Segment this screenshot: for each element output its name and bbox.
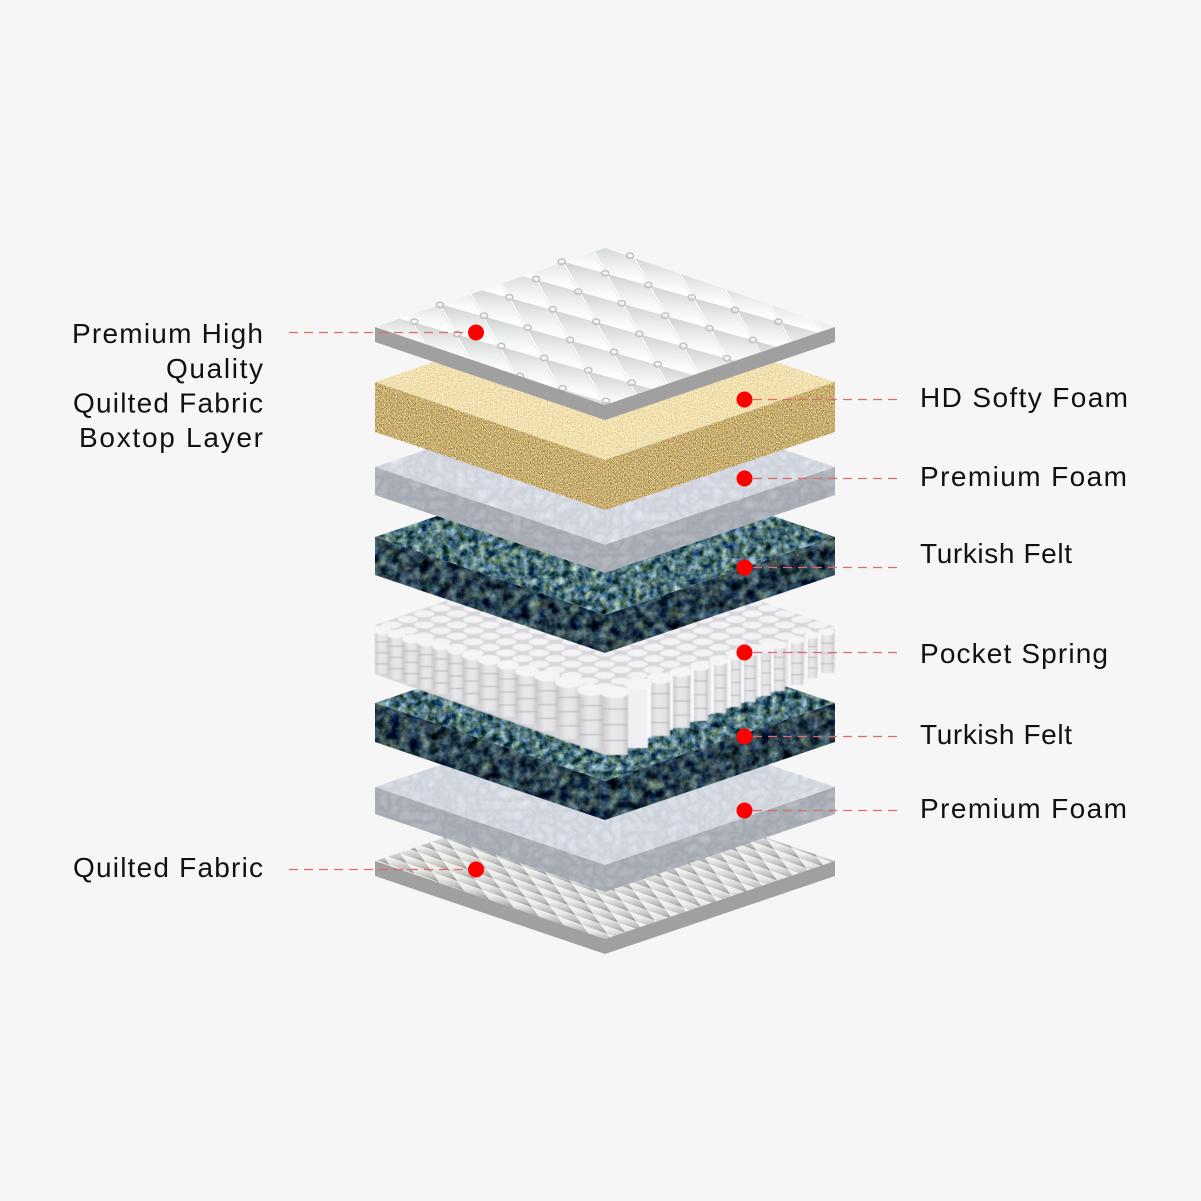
label: Turkish Felt lower: Turkish Felt [920,719,1072,750]
leader: HD Softy Foam [736,392,897,408]
label: Turkish Felt upper: Turkish Felt [920,538,1072,569]
layer: upper premium foam [375,389,835,573]
bottom fabric top face [375,783,835,939]
spring top face [375,547,835,703]
label: Premium High Quality Quilted Fabric Boxtop Layer: Quilted Fabric [73,388,263,418]
spring left side coils [375,630,628,755]
leader: Premium Foam lower [736,802,897,818]
layer: HD softy foam [375,304,835,510]
layer: bottom quilted fabric [375,783,835,954]
layer: pocket springs [373,547,835,755]
leader: Premium Foam upper [736,470,897,486]
label: Premium Foam upper: Premium Foam [920,461,1127,492]
spring right side coils [628,628,835,748]
upper foam side edges [375,467,835,573]
upper felt top face [375,459,835,615]
upper foam top face [375,389,835,545]
beige foam side edges [375,382,835,510]
layer: lower premium foam [375,709,835,892]
beige foam top face [375,304,835,460]
label: Premium High Quality Quilted Fabric Boxtop Layer: Boxtop Layer [79,422,263,453]
lower felt top face [375,625,835,781]
bottom fabric side edges [375,861,835,954]
spring coil caps [373,626,834,698]
label: Premium Foam lower: Premium Foam [920,793,1127,824]
leader: Turkish Felt upper [736,560,897,576]
label: Pocket Spring: Pocket Spring [920,638,1108,669]
layer: lower Turkish felt [375,625,835,820]
leader lines and markers [289,324,897,878]
label: Premium High Quality Quilted Fabric Boxtop Layer: Premium High [72,318,263,349]
lower foam side edges [375,787,835,892]
leader: Pocket Spring [736,644,897,660]
label: HD Softy Foam: HD Softy Foam [920,382,1128,413]
boxtop buttons [411,253,782,404]
leader: Quilted Fabric [289,862,484,878]
boxtop side edges [375,327,835,420]
label: Premium High Quality Quilted Fabric Boxtop Layer: Quality [166,353,263,384]
layer: upper Turkish felt [375,459,835,653]
label: Premium High Quality Quilted Fabric Boxtop Layer [72,318,263,453]
label: Quilted Fabric: Quilted Fabric [73,852,263,883]
leader: Turkish Felt lower [736,728,897,744]
lower felt side edges [375,703,835,820]
lower foam top face [375,709,835,865]
leader: Premium High Quality Quilted Fabric Boxtop Layer [289,324,484,340]
layer: quilted boxtop fabric [375,248,835,420]
upper felt side edges [375,537,835,653]
boxtop top face [375,248,835,405]
